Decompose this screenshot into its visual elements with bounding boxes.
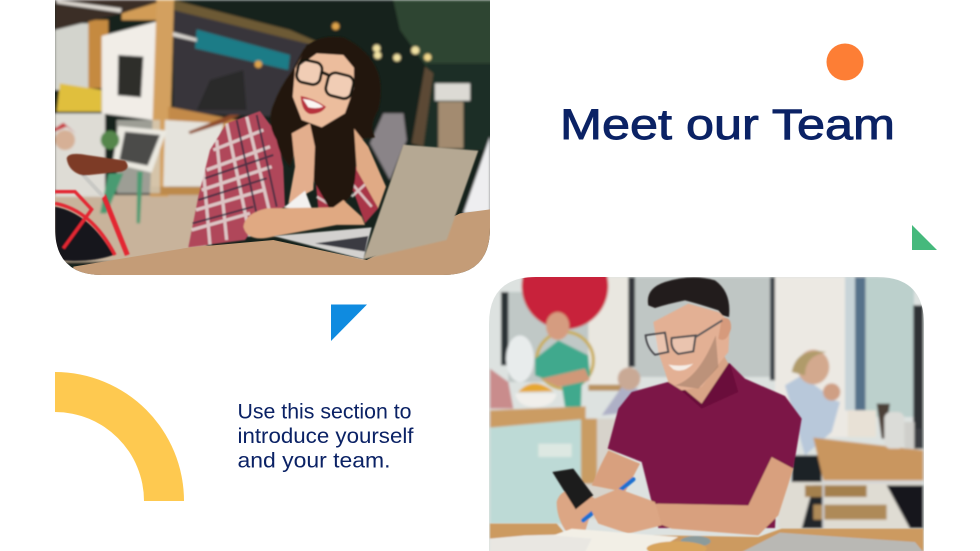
intro text: Use this section to <box>238 400 412 424</box>
intro text: and your team. <box>238 450 390 472</box>
photo 2 table with papers and laptop <box>490 524 923 551</box>
photo 1 red bicycle <box>55 154 128 261</box>
blue triangle <box>331 304 367 341</box>
intro text: introduce yourself <box>238 425 414 448</box>
photo 1 laptop <box>273 145 478 259</box>
intro text <box>238 400 414 472</box>
title: Meet our Team <box>560 101 895 149</box>
photo 2 background: cafe interior <box>489 277 924 551</box>
orange circle <box>826 44 864 80</box>
photo 1 woman <box>188 37 386 247</box>
photo: man in maroon polo with phone <box>489 277 924 551</box>
yellow quarter arc <box>55 372 184 501</box>
photo 1 table <box>73 209 490 280</box>
photo: smiling woman with laptop <box>50 0 495 280</box>
photo 2 man <box>552 277 802 535</box>
photo 1 background: food kiosk and trees <box>50 0 495 280</box>
green triangle <box>912 225 937 250</box>
